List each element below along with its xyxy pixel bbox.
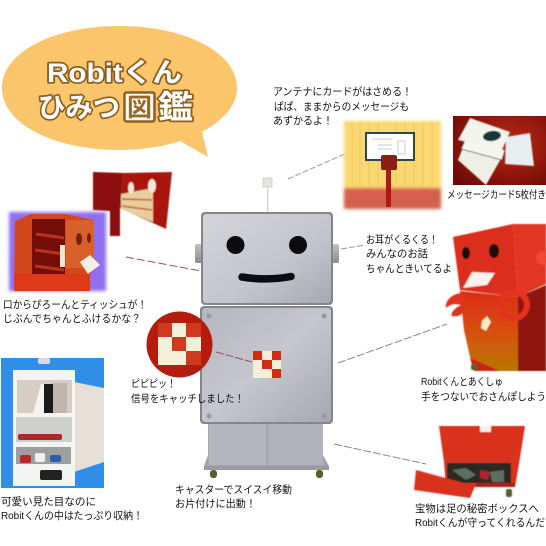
caption: tissue: 口からぴろーんとティッシュが！ <box>3 298 147 311</box>
caption: ears: ちゃんときいてるよ <box>366 263 452 275</box>
ears <box>195 244 339 263</box>
left hand <box>446 293 465 316</box>
photo: message cards <box>453 116 546 185</box>
robot <box>195 178 339 478</box>
caption: casters <box>175 483 292 510</box>
caption: storage: 可愛い見た目なのに <box>1 495 96 508</box>
body <box>200 306 333 424</box>
title text: 図 <box>127 94 152 122</box>
dashed leader: antenna <box>288 153 347 179</box>
body front <box>460 291 518 371</box>
eyes <box>226 236 307 254</box>
caption: antenna card: あずかるよ！ <box>273 115 333 127</box>
photo: red robot holding hands <box>446 224 546 371</box>
caption: ears <box>366 233 452 275</box>
caption: signal <box>131 378 244 405</box>
caption: ears: お耳がくるくる！ <box>366 233 438 246</box>
body side <box>518 285 546 371</box>
head <box>201 212 333 305</box>
caption: ears: みんなのお話 <box>366 248 428 260</box>
caption: tissue: じぶんでちゃんとふけるかな？ <box>3 313 141 325</box>
title text: ひみつ <box>38 92 120 123</box>
right hand <box>501 292 527 318</box>
wheels <box>210 470 323 478</box>
caption: storage <box>1 495 143 522</box>
caption: signal: ピピピッ！ <box>131 378 176 390</box>
caption: foot box: 宝物は足の秘密ボックスへ <box>415 502 539 515</box>
dashed leader: emblem <box>216 352 252 362</box>
eyes <box>462 247 470 259</box>
head side <box>513 224 546 297</box>
caption: hands <box>421 376 546 403</box>
head front <box>453 224 518 297</box>
caption: storage: Robitくんの中はたっぷり収納！ <box>1 509 143 522</box>
dashed leader: ear <box>341 245 365 249</box>
photo: secret foot box <box>414 426 525 498</box>
photo: open head with tissue box <box>93 172 172 236</box>
dashed leader: mouth <box>126 257 228 276</box>
mouth <box>242 276 291 279</box>
caption: casters: キャスターでスイスイ移動 <box>175 483 292 496</box>
dashed leader: hands <box>338 324 447 363</box>
photo: antenna with card <box>344 121 441 209</box>
caption: antenna card <box>273 85 412 127</box>
title text <box>38 58 193 125</box>
caption: signal: 信号をキャッチしました！ <box>131 392 244 405</box>
caption: antenna card: ぱぱ、ままからのメッセージも <box>274 101 409 113</box>
antenna <box>263 178 272 212</box>
title text: 鑑 <box>158 89 193 125</box>
caption: casters: お片付けに出動！ <box>175 497 256 510</box>
caption: antenna card: アンテナにカードがはさめる！ <box>273 85 412 98</box>
title box around 図 <box>124 92 154 122</box>
dashed leader: foot box <box>334 444 426 464</box>
legs <box>204 423 329 470</box>
chest emblem <box>253 351 281 378</box>
title speech bubble <box>2 26 237 157</box>
title text: Robitくん <box>47 58 182 88</box>
photo: tissue from mouth on purple background <box>9 212 106 291</box>
mouth <box>463 272 495 288</box>
emblem close-up <box>146 312 212 378</box>
caption: tissue <box>3 298 147 325</box>
caption: hands: Robitくんとあくしゅ <box>421 376 503 388</box>
photo: storage interior <box>1 358 104 488</box>
caption: foot box <box>415 502 545 529</box>
